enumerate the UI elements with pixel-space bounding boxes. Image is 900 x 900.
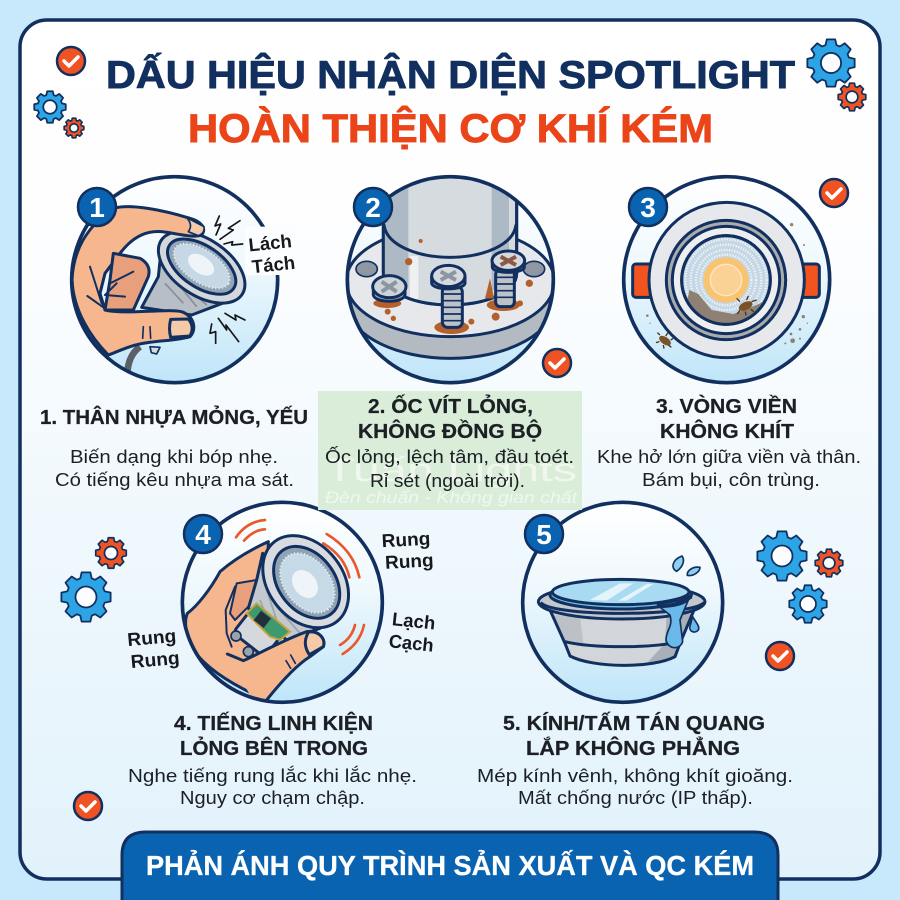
panel: step 4 illustration: Rung — [381, 528, 431, 551]
text: step 4: LỎNG BÊN TRONG — [180, 736, 368, 760]
panel: step 3 illustration — [624, 177, 830, 383]
text: step 2: 2. ỐC VÍT LỎNG, — [368, 394, 533, 418]
title: HOÀN THIỆN CƠ KHÍ KÉM — [188, 107, 713, 151]
panel: step 4 illustration: Lạch — [391, 608, 436, 634]
text: step 5 — [477, 712, 793, 808]
icon: check step 4 — [74, 792, 102, 820]
icon: top-right gears — [807, 39, 866, 111]
text: step 1 — [40, 405, 308, 490]
text: step 4: Nguy cơ chạm chập. — [180, 787, 365, 808]
panel: step 4 illustration: Cạch — [388, 630, 435, 656]
icon: check step 2 — [543, 349, 571, 377]
text: step 1: Biến dạng khi bóp nhẹ. — [70, 446, 278, 467]
text: step 3: Khe hở lớn giữa viền và thân. — [597, 446, 861, 467]
text: step 4 — [128, 711, 417, 808]
panel: step 4 illustration: Rung — [126, 625, 177, 650]
number badges: 2 — [365, 192, 381, 223]
panel: step 1 illustration — [72, 177, 298, 383]
number badges: 5 — [536, 519, 552, 550]
text: step 5: LẮP KHÔNG PHẲNG — [526, 736, 740, 760]
text: step 5: Mép kính vênh, không khít gioăng. — [477, 765, 793, 786]
panel: step 4 illustration: Rung — [130, 647, 180, 672]
text: step 3 — [597, 394, 861, 490]
panel: step 4 illustration: Rung — [384, 549, 434, 573]
text: step 5: 5. KÍNH/TẤM TÁN QUANG — [503, 712, 765, 735]
icon: top-left check and gears — [34, 47, 85, 138]
text: step 2 — [325, 394, 574, 491]
text: step 5: Mất chống nước (IP thấp). — [518, 787, 753, 808]
number badges: 1 — [89, 192, 105, 223]
text: step 3: 3. VÒNG VIỀN — [656, 394, 797, 418]
text: step 4: 4. TIẾNG LINH KIỆN — [174, 711, 373, 735]
icon: check step 5 — [766, 642, 794, 670]
icon: mid-left gears — [61, 538, 126, 622]
text: step 2: Ốc lỏng, lệch tâm, đầu toét. — [325, 446, 574, 467]
text: step 3: Bám bụi, côn trùng. — [642, 469, 820, 490]
panel: step 1 illustration: Lách — [247, 230, 293, 256]
panel: step 2 illustration — [346, 177, 555, 383]
title: DẤU HIỆU NHẬN DIỆN SPOTLIGHT — [106, 53, 795, 97]
icon: check step 3 — [820, 179, 848, 207]
number badges — [78, 188, 667, 553]
watermark text — [325, 452, 578, 507]
text: step 2: Rỉ sét (ngoài trời). — [370, 470, 525, 491]
bottom banner — [122, 832, 778, 900]
text: step 1: 1. THÂN NHỰA MỎNG, YẾU — [40, 405, 308, 429]
panel: step 5 illustration — [523, 502, 723, 702]
icon: right gears — [757, 531, 843, 623]
panel: step 4 illustration — [126, 502, 436, 702]
watermark text: Tuấn Lights — [325, 452, 577, 488]
text: step 3: KHÔNG KHÍT — [660, 419, 794, 443]
text: step 4: Nghe tiếng rung lắc khi lắc nhẹ. — [128, 765, 417, 786]
text: step 2: KHÔNG ĐỒNG BỘ — [358, 419, 542, 443]
number badges: 3 — [640, 192, 656, 223]
watermark text: Đèn chuẩn - Không gian chất — [325, 488, 578, 507]
watermark box — [318, 391, 582, 510]
bottom banner: PHẢN ÁNH QUY TRÌNH SẢN XUẤT VÀ QC KÉM — [146, 849, 754, 881]
title — [106, 53, 795, 151]
text: step 1: Có tiếng kêu nhựa ma sát. — [55, 469, 294, 490]
number badges: 4 — [195, 519, 211, 550]
panel: step 1 illustration: Tách — [251, 252, 296, 277]
